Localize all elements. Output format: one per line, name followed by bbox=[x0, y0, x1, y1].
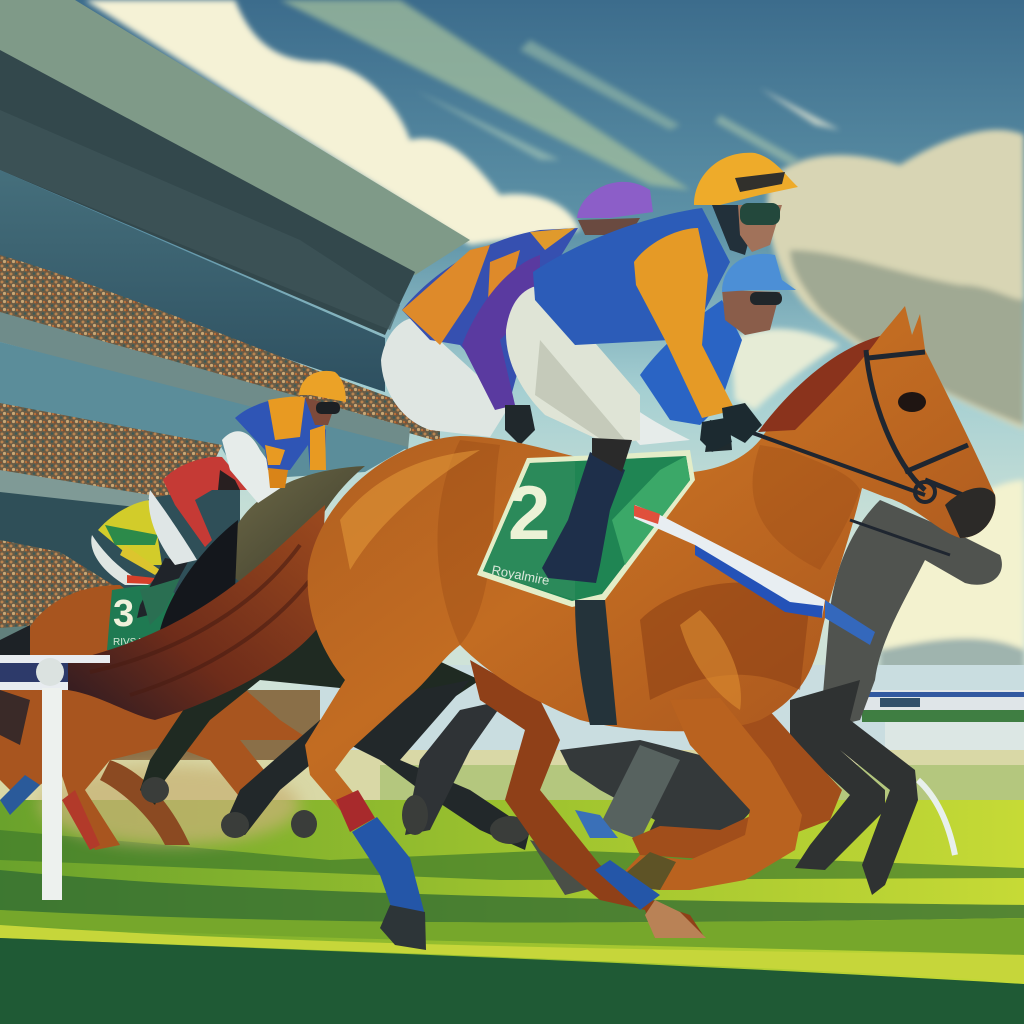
gloves bbox=[722, 403, 762, 443]
right rail bbox=[862, 690, 1024, 750]
middle windows bbox=[0, 342, 408, 480]
blue hoof wrap bbox=[575, 810, 618, 838]
horse eye bbox=[898, 392, 926, 412]
lower crowd bbox=[0, 540, 118, 630]
rounded dark rump bbox=[137, 466, 365, 630]
grey horse neck and head bbox=[820, 500, 1002, 730]
horse muzzle bbox=[945, 488, 995, 538]
dust behind rear horses bbox=[40, 765, 300, 845]
cloud: behind grandstand bbox=[85, 0, 580, 245]
helmet bbox=[694, 153, 798, 205]
track background bbox=[0, 750, 1024, 820]
saddle cloth name: Royalmire bbox=[490, 562, 551, 588]
far hind hoof bbox=[645, 900, 706, 938]
goggles bbox=[740, 203, 780, 225]
grass bbox=[0, 800, 1024, 1024]
body muscle shading bbox=[438, 440, 860, 700]
cloud: right bank bbox=[730, 130, 1024, 430]
orange helmet jockey bbox=[222, 371, 346, 503]
far inner field bbox=[380, 765, 1024, 805]
face bbox=[738, 205, 782, 252]
main jockey bbox=[506, 153, 798, 583]
breast girth bbox=[634, 505, 875, 645]
main horse body bbox=[305, 306, 995, 810]
dark saddle cloth bbox=[140, 578, 180, 625]
girth strap bbox=[575, 600, 617, 725]
rail post bbox=[42, 688, 62, 900]
saddle cloth bbox=[477, 450, 695, 607]
glove bbox=[505, 405, 535, 445]
white breeches bbox=[506, 285, 640, 445]
rear chestnut horse bbox=[0, 582, 310, 850]
highlight on shoulder bbox=[680, 610, 741, 710]
silks bbox=[235, 397, 326, 470]
curved far rail bbox=[918, 780, 955, 855]
bridle and reins bbox=[750, 350, 975, 555]
main horse far foreleg bbox=[632, 700, 842, 860]
black horse group legs bbox=[140, 600, 530, 850]
orange sleeve bbox=[634, 228, 735, 418]
purple helmet jockey bbox=[381, 182, 653, 445]
shaded ground behind rear horses bbox=[0, 690, 320, 760]
main horse tail bbox=[65, 505, 325, 720]
black horse hooves bbox=[141, 777, 530, 844]
rail knob bbox=[36, 658, 64, 686]
sleeve bbox=[462, 255, 540, 410]
grandstand bbox=[0, 0, 470, 655]
sky bbox=[0, 0, 1024, 780]
upper crowd bbox=[0, 255, 440, 442]
grandstand roof bbox=[0, 0, 470, 275]
near hind leg bbox=[336, 790, 426, 950]
lower balcony bbox=[0, 470, 150, 508]
grey horse bbox=[530, 500, 1002, 895]
black mane bbox=[160, 520, 238, 630]
helmet bbox=[577, 182, 653, 218]
cloud: lower right bbox=[880, 480, 1024, 670]
boot bbox=[542, 452, 625, 583]
main horse near foreleg bbox=[612, 698, 802, 890]
middle crowd bbox=[0, 403, 222, 498]
goggles bbox=[316, 402, 340, 414]
left rail bbox=[0, 655, 110, 900]
silks bbox=[402, 228, 578, 400]
dark horse boot bbox=[137, 558, 188, 618]
lower stand backing bbox=[0, 470, 240, 650]
streak clouds bbox=[280, 0, 840, 190]
mane bbox=[758, 336, 880, 432]
collar bbox=[712, 205, 758, 255]
saddle number: 2 bbox=[508, 471, 550, 556]
upper balcony bbox=[0, 312, 410, 450]
blue bandage bbox=[352, 817, 425, 918]
white breeches bbox=[381, 318, 510, 437]
number 3: 3 bbox=[113, 593, 134, 635]
yellow jockey bbox=[91, 500, 162, 585]
rear saddle label: RIVSAM bbox=[113, 637, 151, 648]
grandstand roof underside bbox=[0, 50, 415, 335]
face bbox=[305, 398, 335, 425]
red jockey bbox=[149, 457, 250, 565]
blue silk torso bbox=[533, 208, 730, 345]
white breeches bbox=[222, 431, 285, 503]
main horse far hind leg bbox=[470, 660, 705, 938]
highlight on hindquarter bbox=[340, 450, 480, 570]
far hind bandage bbox=[595, 860, 660, 910]
hoof bbox=[380, 905, 426, 950]
distant horizon band bbox=[300, 665, 1024, 755]
grey horse forelegs bbox=[790, 680, 918, 895]
blue helmet jockey bbox=[627, 254, 796, 452]
rear horse saddle cloth bbox=[107, 582, 180, 650]
upper windows bbox=[0, 170, 385, 392]
helmet bbox=[299, 371, 346, 402]
